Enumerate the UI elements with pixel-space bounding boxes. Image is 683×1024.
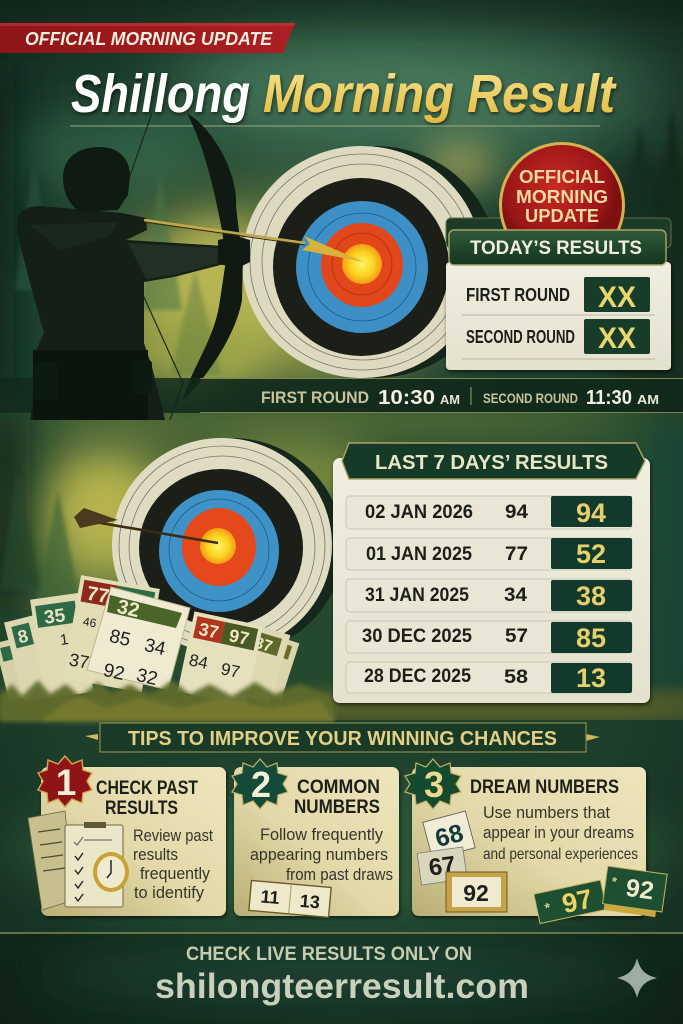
number tiles: 11 13: 13	[299, 891, 321, 912]
row: 31 Jan 2025: 31 JAN 2025	[365, 585, 469, 606]
ticket: 8: 8	[16, 626, 30, 647]
archer silhouette	[17, 147, 250, 420]
text: dream numbers body: appear in your dreams	[483, 823, 634, 842]
timing band: SECOND ROUND	[483, 390, 578, 406]
ticket: 77	[63, 575, 160, 692]
header: today's results	[449, 230, 666, 265]
ticket: 37 97: 97	[219, 659, 242, 682]
row: 02 Jan 2026: 94	[505, 502, 528, 523]
row: 02 Jan 2026: 94	[576, 498, 606, 528]
text: dream numbers body: and personal experiences	[483, 846, 638, 863]
badge: 1: 1	[56, 762, 76, 803]
text: dream numbers body: Use numbers that	[483, 803, 610, 822]
row: first round: XX	[598, 281, 636, 314]
ticket: 77: 46	[82, 614, 98, 630]
panel: today's results	[446, 230, 671, 370]
text: check past results body: Review past	[133, 826, 213, 845]
bow and string	[118, 113, 243, 420]
tile: 68	[423, 811, 475, 859]
row: 30 Dec 2025: 57	[505, 626, 528, 647]
ticket: 37 97: 84	[187, 651, 210, 673]
text: common numbers body: from past draws	[286, 865, 393, 884]
tile: 67	[417, 847, 467, 885]
row: 02 Jan 2026	[346, 496, 632, 529]
row: 01 Jan 2025	[346, 538, 632, 570]
text: check past results body: frequently	[140, 864, 210, 883]
badge: official morning update: MORNING	[516, 187, 608, 207]
header: today's results: TODAY’S RESULTS	[470, 237, 642, 259]
text: check past results body	[133, 826, 213, 902]
row: 31 Jan 2025: 34	[504, 585, 527, 606]
heading: dream numbers: DREAM NUMBERS	[470, 777, 619, 798]
ticket: main 32: 32	[115, 596, 142, 622]
ticket: 77: 37	[68, 650, 91, 673]
row: 28 Dec 2025: 28 DEC 2025	[364, 666, 471, 687]
ticket: main 32: 34	[142, 635, 168, 660]
heading: common numbers	[294, 777, 380, 818]
tile: 97 green: 97	[559, 883, 595, 919]
title: Shillong Morning Result	[71, 64, 617, 124]
heading: common numbers: NUMBERS	[294, 797, 380, 818]
ticket: 77: 77	[85, 583, 111, 608]
icon: four-point star	[617, 958, 657, 998]
badge: official morning update	[499, 142, 625, 268]
ticket: 37 97: 37	[197, 619, 221, 643]
text: common numbers body	[250, 825, 393, 884]
row: first round: FIRST ROUND	[466, 285, 570, 305]
panel: last 7 days results	[333, 443, 650, 703]
title: Shillong Morning Result: Shillong	[71, 64, 250, 124]
text: common numbers body: Follow frequently	[260, 825, 383, 844]
icon: documents, clipboard and clock	[28, 811, 129, 910]
tile: 92 gold: 92	[463, 880, 489, 906]
row: 28 Dec 2025: 13	[576, 663, 606, 693]
row: 30 Dec 2025: 30 DEC 2025	[362, 626, 472, 647]
timing band: AM	[637, 392, 659, 407]
ticket: main 32	[87, 587, 190, 690]
timing band: 10:30	[378, 387, 435, 409]
row: second round: XX	[598, 322, 636, 355]
heading: check past results	[96, 778, 198, 819]
ticket: main 32: 85	[107, 626, 133, 651]
ticket: 8	[4, 612, 68, 702]
row: first round	[466, 277, 650, 314]
tile: 97 green: *	[543, 899, 552, 916]
timing band: FIRST ROUND	[261, 388, 369, 407]
target board: second	[112, 438, 343, 654]
tile: 67: 67	[427, 851, 457, 882]
footer call to action	[155, 944, 529, 1006]
timing band: 11:30	[586, 387, 632, 409]
row: 01 Jan 2025: 52	[576, 539, 606, 569]
row: second round: SECOND ROUND	[466, 327, 575, 347]
timing band	[0, 378, 683, 413]
ticket: main 32: 32	[134, 665, 160, 690]
ticket: main 32: 92	[101, 660, 127, 685]
grass foreground	[0, 680, 335, 722]
text: dream numbers body	[483, 803, 638, 863]
header: last 7 days: LAST 7 DAYS’ RESULTS	[375, 452, 608, 474]
row: 28 Dec 2025: 58	[504, 667, 528, 688]
text: common numbers body: appearing numbers	[250, 845, 388, 864]
badge: official morning update: UPDATE	[525, 206, 599, 226]
row: second round	[466, 319, 650, 355]
target board: main	[242, 146, 497, 378]
tile: 92 green: *	[611, 874, 619, 889]
tile: 92 green: 92	[624, 874, 656, 905]
panel top strip behind badge	[446, 218, 671, 248]
ticket: 35: 35	[43, 605, 67, 629]
title: Shillong Morning Result: Morning Result	[263, 64, 617, 124]
badge: 2	[232, 759, 288, 809]
card 3: dream numbers	[405, 759, 667, 924]
ticket: far right small	[252, 634, 299, 700]
row: 31 Jan 2025: 38	[576, 581, 606, 611]
ticket: 37 97	[177, 611, 263, 706]
heading: common numbers: COMMON	[297, 777, 380, 798]
ticket: 35: 1	[59, 631, 70, 649]
badge: 1	[38, 756, 92, 807]
tips heading banner: TIPS TO IMPROVE YOUR WINNING CHANCES	[128, 728, 557, 750]
tile: 92 gold	[446, 872, 507, 912]
row: 30 Dec 2025: 85	[576, 623, 606, 653]
heading: check past results: CHECK PAST	[96, 778, 198, 799]
badge: official morning update: OFFICIAL	[519, 167, 605, 187]
row: 28 Dec 2025	[346, 662, 632, 693]
ticket: far left	[0, 634, 48, 702]
scattered result tickets	[0, 575, 299, 706]
tile: 92 green	[602, 866, 667, 918]
badge: 3	[405, 759, 461, 809]
row: 01 Jan 2025: 01 JAN 2025	[366, 544, 472, 565]
tile: 97 green	[534, 880, 607, 924]
ticket: 35	[30, 593, 94, 699]
number tiles: 11 13	[249, 880, 331, 917]
timing band: AM	[440, 392, 460, 407]
ticket: 37 97: 97	[227, 625, 251, 649]
heading: check past results: RESULTS	[105, 798, 178, 819]
row: 02 Jan 2026: 02 JAN 2026	[365, 502, 473, 523]
row: 30 Dec 2025	[346, 621, 632, 653]
text: check past results body: results	[133, 845, 178, 864]
badge: 2: 2	[251, 764, 271, 805]
header: last 7 days	[342, 443, 645, 479]
arrow hitting main target	[144, 220, 364, 262]
footer call to action: CHECK LIVE RESULTS ONLY ON	[186, 944, 472, 965]
row: 01 Jan 2025: 77	[505, 544, 528, 565]
card 2: common numbers	[232, 759, 399, 917]
row: 31 Jan 2025	[346, 579, 632, 612]
badge: 3: 3	[424, 764, 444, 805]
arrow hitting second target	[74, 508, 218, 543]
tips heading banner	[85, 723, 600, 752]
ticket: right 37: 37	[252, 635, 274, 656]
text: check past results body: to identify	[134, 883, 204, 902]
tile: 68: 68	[432, 819, 466, 853]
footer call to action: shilongteerresult.com	[155, 967, 529, 1006]
red ribbon: official morning update: OFFICIAL MORNING UPDATE	[25, 29, 273, 49]
number tiles: 11 13: 11	[260, 886, 280, 908]
ticket: right 37	[227, 622, 290, 704]
card 1: check past results	[28, 756, 226, 916]
red ribbon: official morning update	[0, 23, 295, 53]
